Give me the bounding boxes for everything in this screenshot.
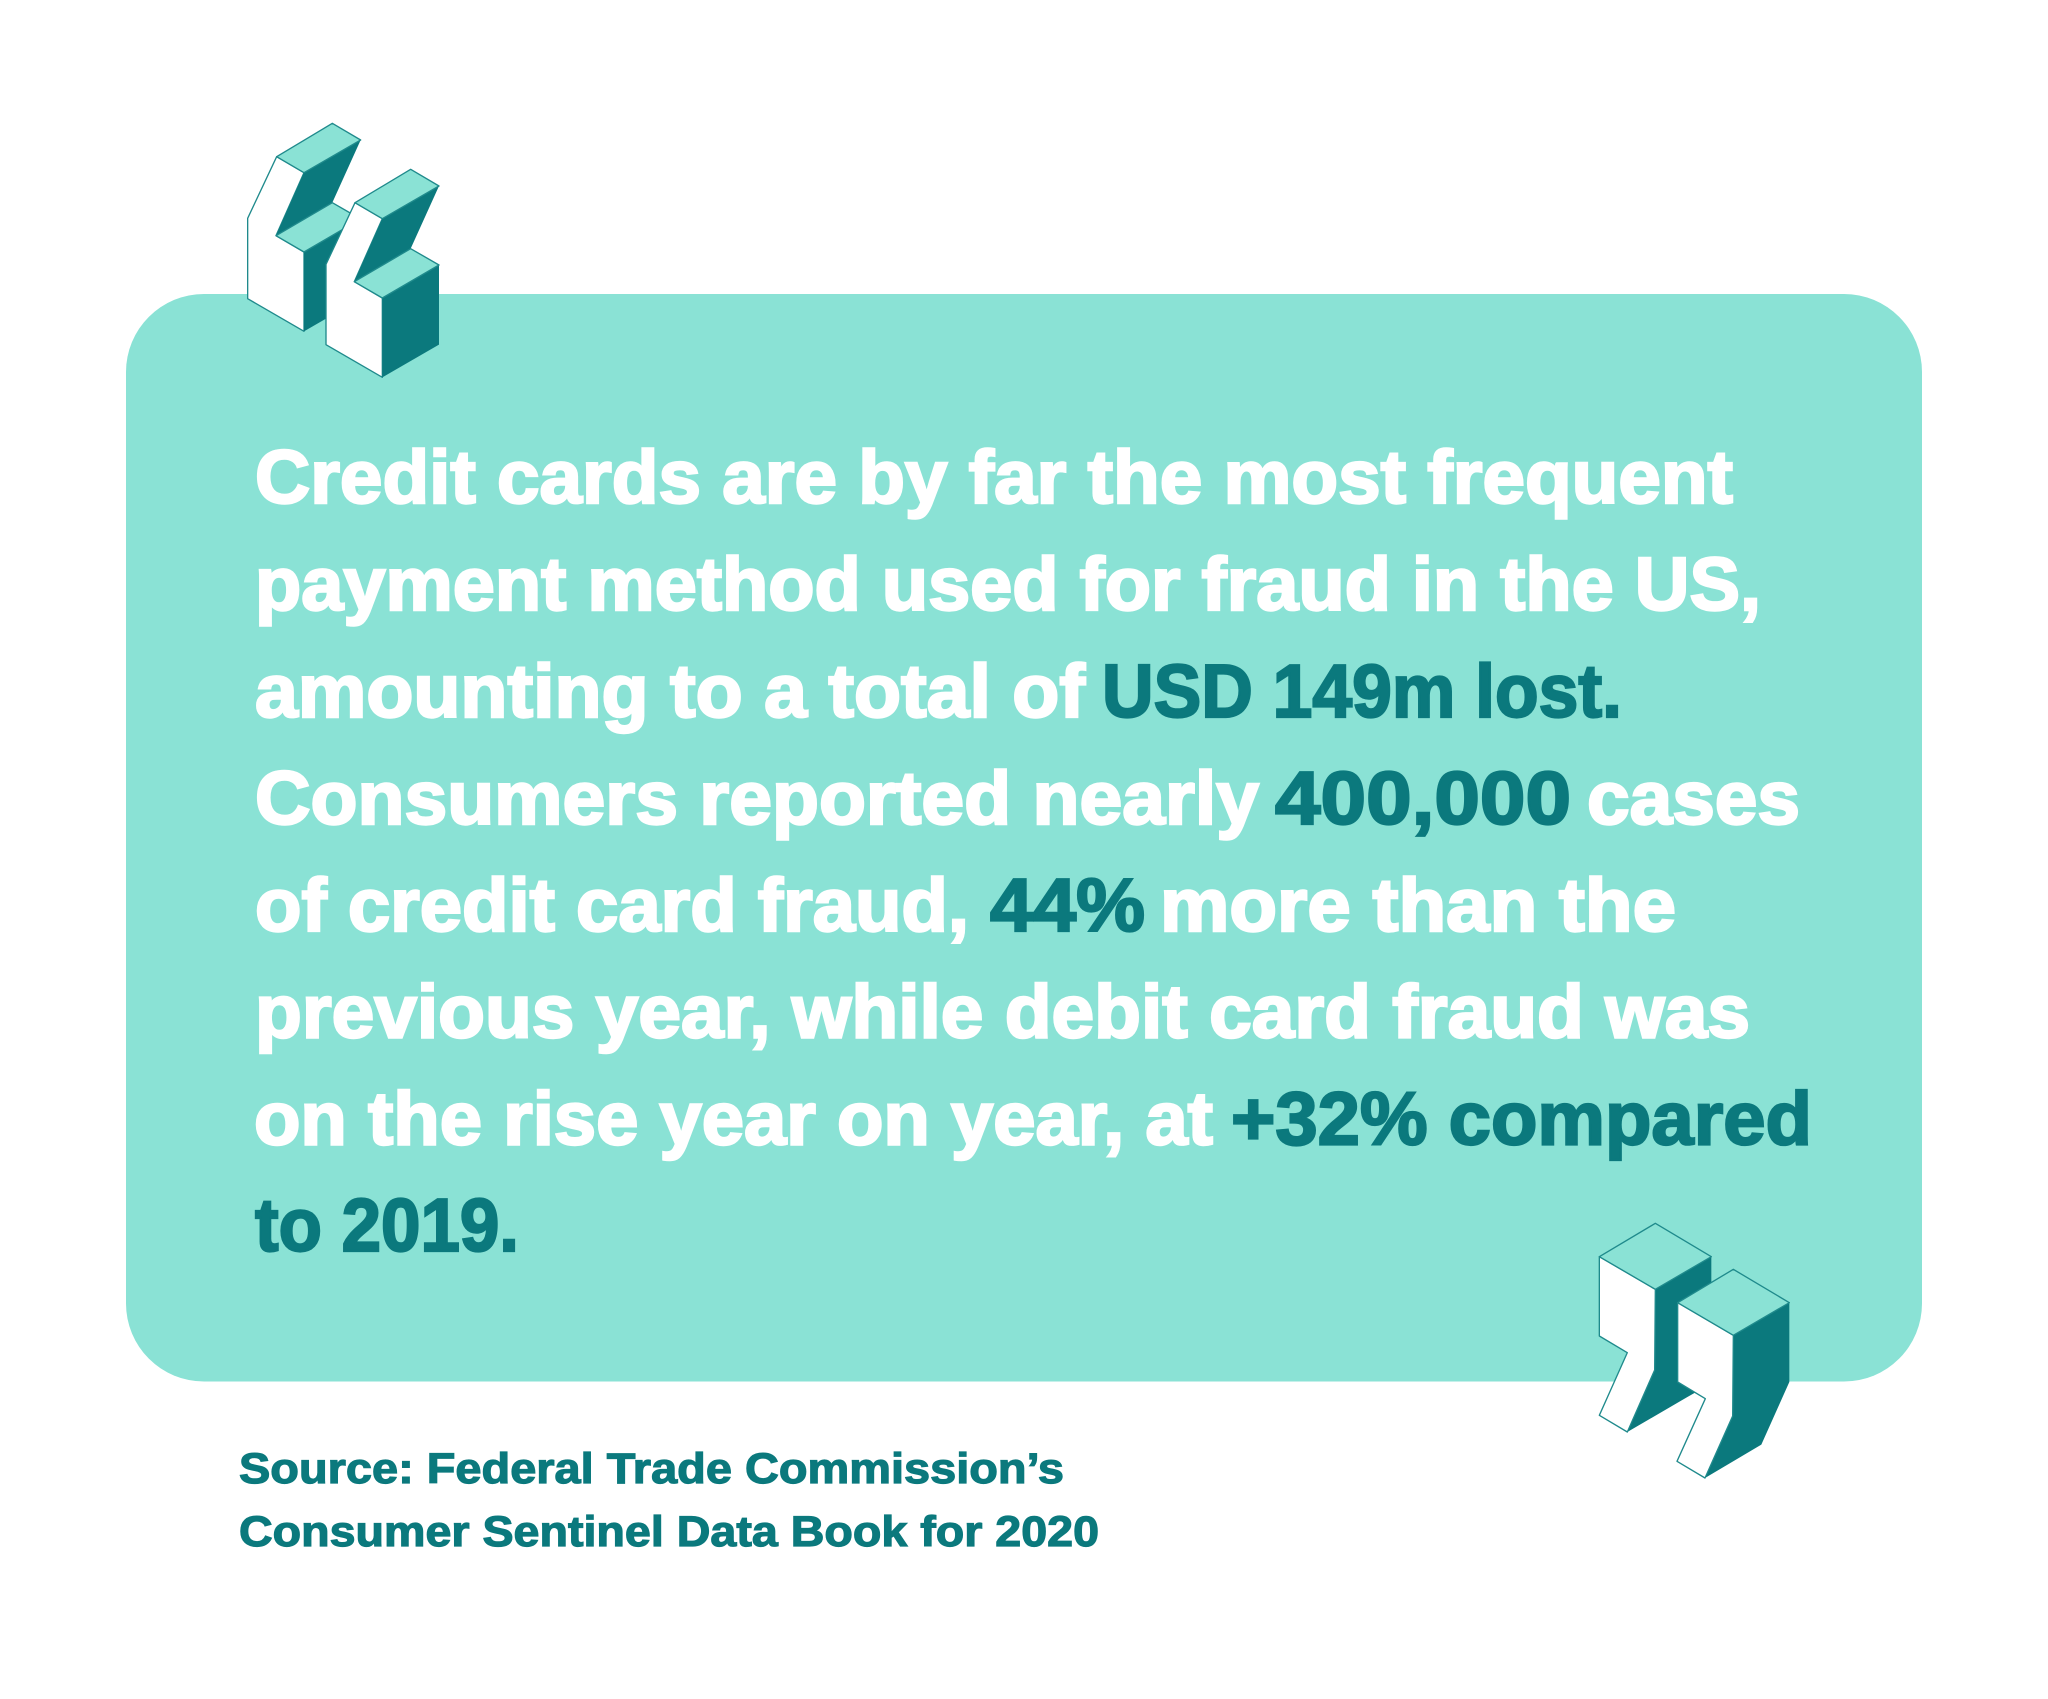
panel: quote background <box>126 294 1922 1382</box>
icon: closing quotation mark <box>1599 1223 1789 1478</box>
line 8 highlight: to 2019: to 2019. <box>255 1183 519 1267</box>
quote text <box>254 435 1812 1267</box>
line 2: payment method used for fraud in the US, <box>255 542 1761 626</box>
line 4 highlight: 400,000: 400,000 <box>1275 756 1571 840</box>
line 4 white: Consumers reported nearly <box>255 756 1259 840</box>
line 3 highlight: USD 149m lost: USD 149m lost. <box>1102 649 1622 733</box>
source line 1: Source: Federal Trade Commission’s <box>239 1445 1064 1493</box>
line 7 white: on the rise year on year, at <box>254 1076 1213 1160</box>
back mark <box>1599 1223 1711 1432</box>
line 5 white: of credit card fraud, <box>255 863 969 947</box>
line 5 highlight: 44%: 44% <box>990 863 1145 947</box>
source note <box>239 1445 1099 1556</box>
icon: opening quotation mark <box>248 123 439 377</box>
back mark <box>248 123 361 331</box>
line 6: previous year, while debit card fraud was <box>255 970 1750 1054</box>
line 5 white end: more than the <box>1160 863 1676 947</box>
front mark <box>1677 1269 1789 1478</box>
line 1: Credit cards are by far the most frequent <box>255 435 1733 519</box>
source line 2: Consumer Sentinel Data Book for 2020 <box>239 1508 1099 1556</box>
line 3 white: amounting to a total of <box>255 649 1086 733</box>
line 7 highlight: +32% compared: +32% compared <box>1231 1076 1812 1160</box>
line 4 white end: cases <box>1587 756 1800 840</box>
front mark <box>326 169 439 377</box>
